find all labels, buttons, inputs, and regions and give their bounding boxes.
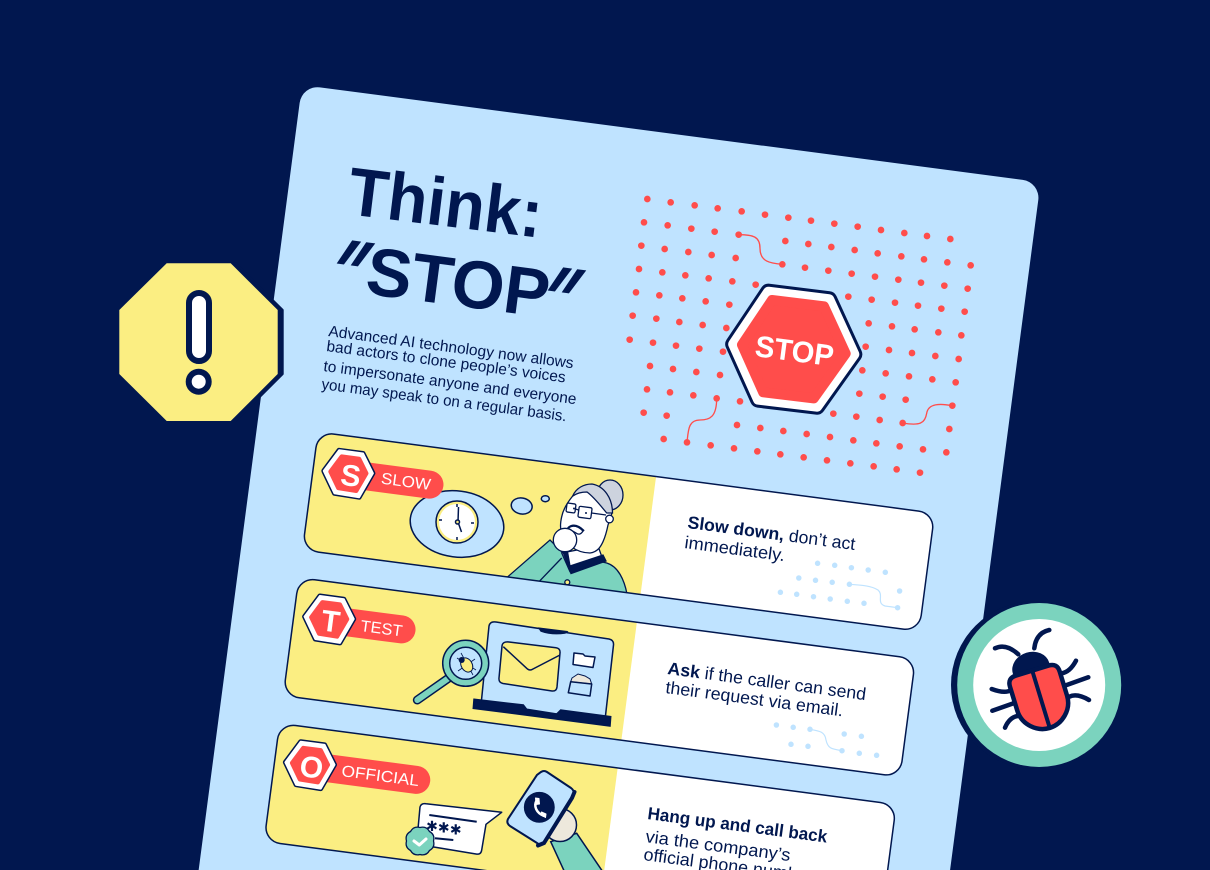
title: STOP <box>362 233 554 332</box>
card: test <box>283 578 915 777</box>
text: test: Ask if the caller can send <box>666 658 867 704</box>
title <box>288 153 605 354</box>
icon: magnifier with bug <box>417 640 489 700</box>
illustration: hand holding phone <box>507 771 605 870</box>
icon: warning octagon <box>119 263 283 421</box>
badge: S <box>324 450 373 497</box>
label pill: slow <box>346 460 445 500</box>
label pill: slow: SLOW <box>380 471 433 494</box>
card background <box>283 578 915 777</box>
card outline <box>283 578 915 777</box>
label pill: test: TEST <box>359 618 404 640</box>
decorative dots <box>776 725 877 755</box>
illustration: thinking woman <box>506 480 628 600</box>
bug head <box>1008 647 1054 689</box>
text: official <box>642 803 829 870</box>
icon: stop sign <box>734 292 854 406</box>
dot field <box>630 199 971 473</box>
icon: stop sign: STOP <box>753 330 836 373</box>
text: slow: immediately. <box>683 532 786 565</box>
text: test: their request via email. <box>664 677 845 720</box>
illustration: laptop with email <box>473 622 614 726</box>
card background <box>264 723 896 870</box>
illustration: speech bubble with password: ✱ <box>450 822 462 838</box>
intro text: you may speak to on a regular basis. <box>320 376 568 425</box>
badge: O <box>285 742 334 789</box>
bug body <box>1007 663 1075 736</box>
title: " <box>499 246 605 354</box>
card outline <box>264 723 896 870</box>
label pill: official <box>308 752 432 796</box>
bug legs <box>992 630 1089 728</box>
badge: S: S <box>339 459 363 494</box>
illustration: speech bubble with password: ✱ <box>438 821 450 837</box>
intro text: bad actors to clone people’s voices <box>325 338 567 386</box>
text: slow: Slow down, don’t act <box>686 512 857 554</box>
illustration: speech bubble with password <box>417 804 502 854</box>
icon: bug badge <box>951 601 1121 769</box>
intro text: Advanced AI technology now allows <box>327 323 575 372</box>
text: official: Hang up and call back <box>646 803 829 847</box>
label pill: official: OFFICIAL <box>340 763 420 790</box>
card outline <box>302 432 935 631</box>
intro text <box>320 323 578 425</box>
badge: T: T <box>319 604 342 640</box>
card background <box>302 432 935 631</box>
badge: T <box>305 596 354 643</box>
icon: verified check <box>406 827 434 855</box>
illustration: speech bubble with password: ✱ <box>426 819 438 835</box>
label pill: test <box>327 606 417 645</box>
card: slow <box>302 432 935 631</box>
intro text: to impersonate anyone and everyone <box>322 358 578 408</box>
badge: O: O <box>298 750 325 786</box>
text: official: via the company’s <box>644 826 792 865</box>
illustration: thought bubble and clock <box>409 490 550 558</box>
decorative dots <box>780 563 900 608</box>
title: Think: <box>344 153 547 253</box>
panel: tilted page <box>145 85 1041 870</box>
title: " <box>288 219 394 327</box>
card: official <box>264 723 896 870</box>
